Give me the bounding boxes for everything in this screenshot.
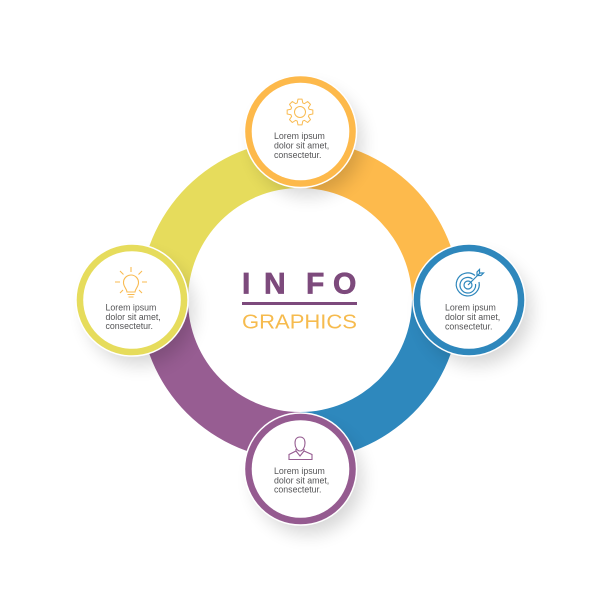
heading: INFO: N: [264, 268, 286, 300]
segment: orange: [300, 140, 460, 300]
node: right, target: [412, 243, 531, 365]
text: right label: dolor sit amet,: [445, 312, 500, 322]
node: left, idea: [75, 243, 194, 365]
ring: four coloured segments: [140, 140, 460, 460]
text: top label: dolor sit amet,: [274, 140, 329, 150]
text: bottom label: consectetur.: [274, 484, 321, 494]
node: bottom, person: [244, 412, 362, 534]
segment: blue: [300, 300, 460, 460]
text: bottom label: dolor sit amet,: [274, 476, 329, 486]
text: left label: dolor sit amet,: [106, 312, 161, 322]
text: top label: Lorem ipsum: [274, 131, 325, 141]
heading: INFO: I: [242, 268, 250, 300]
text: left label: consectetur.: [106, 321, 153, 331]
text: right label: consectetur.: [445, 322, 492, 332]
icon: target: [456, 270, 484, 296]
icon: gear: [287, 99, 313, 125]
node: top, settings: [244, 75, 362, 196]
icon: light bulb: [115, 267, 147, 297]
text: bottom label: Lorem ipsum: [274, 466, 325, 476]
icon: person: [289, 437, 312, 460]
text: left label: Lorem ipsum: [106, 302, 156, 312]
heading: INFO: O: [333, 268, 356, 300]
text: top label: consectetur.: [274, 150, 321, 160]
heading: INFO: F: [306, 268, 324, 300]
segment: purple: [140, 300, 300, 460]
segment: yellow: [140, 140, 300, 300]
title: INFO GRAPHICS: [242, 268, 357, 334]
heading: GRAPHICS: GRAPHICS: [242, 312, 357, 334]
text: right label: Lorem ipsum: [445, 302, 496, 312]
